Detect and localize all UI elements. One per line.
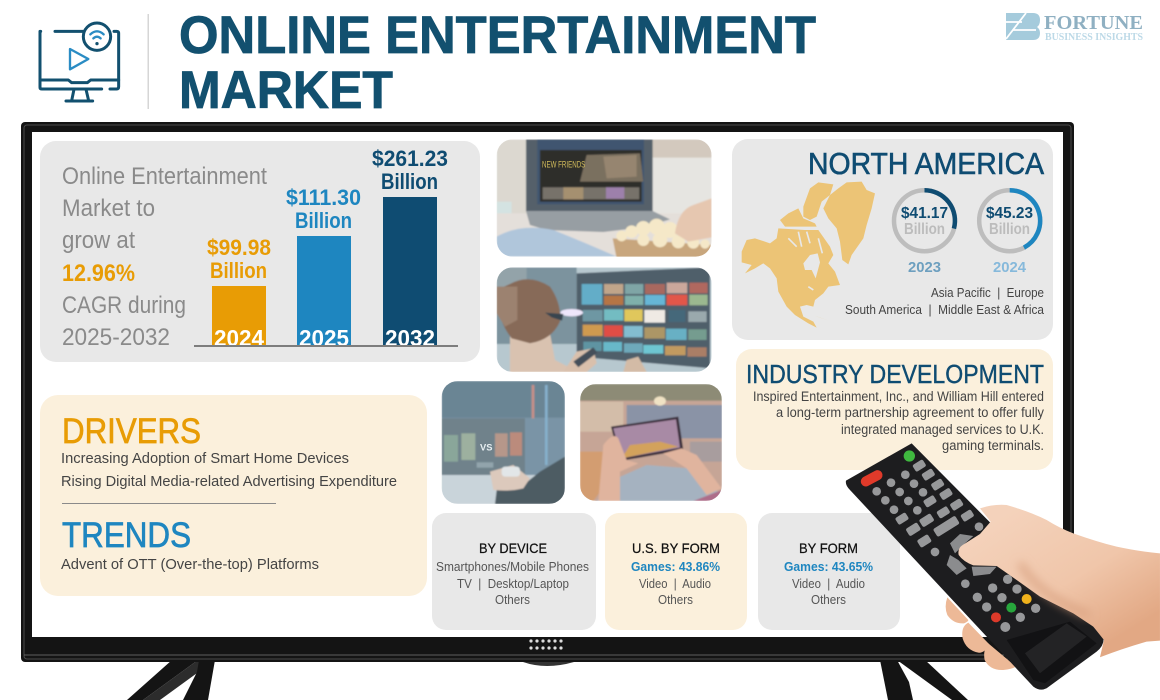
text: CAGR statement: 2025-2032 [62, 324, 170, 351]
panel: u.s. by form: Others [658, 593, 693, 607]
text: development description: Inspired Entertainment, Inc., and William Hill entered [753, 389, 1044, 404]
panel: drivers and trends [40, 395, 427, 596]
text: CAGR statement: Market to [62, 195, 155, 222]
text: development description [753, 389, 1044, 453]
photo: laptop with popcorn: NEW FRIENDS [542, 159, 585, 169]
panel: market growth [40, 141, 480, 362]
photo: mobile gaming in hands [580, 384, 722, 501]
ring: 2023 value [894, 190, 955, 276]
text: development description: gaming terminals. [942, 438, 1044, 453]
bar chart: $99.98 [207, 235, 271, 260]
map: north america [742, 182, 875, 328]
tv stand legs [127, 660, 968, 700]
heading: trends: TRENDS [62, 516, 191, 555]
photo: woman watching streaming tv [497, 267, 712, 372]
photo: console game versus screen [442, 381, 565, 504]
hand and thumb [958, 505, 1160, 657]
panel: u.s. by form: U.S. BY FORM [632, 540, 720, 556]
bar chart [194, 146, 458, 351]
text: trend list: Advent of OTT (Over-the-top) Platforms [61, 556, 319, 573]
bar chart: Billion [381, 169, 438, 194]
fingers behind the remote [946, 597, 1016, 670]
bar chart: 2032 [385, 325, 435, 351]
bar chart: Billion [295, 208, 352, 233]
panel: by form: Games: 43.65% [784, 559, 873, 574]
text: development description: integrated managed services to U.K. [841, 422, 1044, 437]
panel: by device: Smartphones/Mobile Phones [436, 560, 589, 574]
divider [148, 14, 149, 109]
panel: by device [432, 513, 596, 630]
bar chart: $261.23 [372, 146, 448, 171]
text: development description: a long-term partnership agreement to offer fully [776, 405, 1044, 420]
text: driver list: Increasing Adoption of Smart Home Devices [61, 450, 349, 467]
title [179, 6, 816, 120]
text: other regions: Asia Pacific | Europe [931, 285, 1044, 300]
panel: by device: BY DEVICE [479, 540, 547, 556]
text: driver list [61, 450, 397, 490]
panel: by device: Others [495, 593, 530, 607]
logo: Fortune Business Insights: FORTUNE [1044, 12, 1143, 34]
tv frame [21, 122, 1074, 666]
text: CAGR statement: grow at [62, 227, 135, 254]
photo: console game versus screen: VS [480, 442, 492, 452]
bar chart: 2025 [299, 325, 349, 351]
panel: by form: Others [811, 593, 846, 607]
text: CAGR statement: CAGR during [62, 292, 186, 319]
bar chart: 2024 [214, 325, 264, 351]
text: other regions [845, 285, 1045, 317]
icon: monitor with play and wifi [40, 23, 119, 101]
text: CAGR statement: 12.96% [62, 260, 135, 287]
ring: 2024 value [979, 190, 1040, 276]
bar chart: Billion [210, 258, 267, 283]
heading: industry development: INDUSTRY DEVELOPMENT [746, 359, 1044, 389]
panel: u.s. by form: Games: 43.86% [631, 559, 720, 574]
photo: laptop with popcorn [497, 139, 712, 258]
remote buttons [859, 450, 1040, 632]
ring: 2024 value: 2024 [993, 260, 1026, 276]
text: other regions: South America | Middle East & Africa [845, 302, 1045, 317]
ring: 2023 value: $41.17 [901, 205, 948, 222]
logo: Fortune Business Insights: BUSINESS INSIGHTS [1045, 32, 1143, 43]
heading: north america: NORTH AMERICA [808, 146, 1044, 181]
ring: 2023 value: 2023 [908, 260, 941, 276]
panel: by form [758, 513, 900, 630]
ring: 2024 value: Billion [989, 221, 1030, 238]
hand holding remote control [846, 443, 1160, 690]
panel: u.s. by form: Video | Audio [639, 577, 711, 591]
panel: by form: BY FORM [799, 540, 858, 556]
panel: industry development [736, 349, 1053, 470]
panel: by device: TV | Desktop/Laptop [457, 577, 569, 591]
text: CAGR statement: Online Entertainment [62, 163, 267, 190]
title: MARKET [179, 61, 393, 120]
ring: 2023 value: Billion [904, 221, 945, 238]
logo: Fortune Business Insights [1006, 12, 1143, 43]
text: CAGR statement [62, 163, 267, 351]
panel: u.s. by form [605, 513, 747, 630]
ring: 2024 value: $45.23 [986, 205, 1033, 222]
bar chart: $111.30 [286, 185, 361, 210]
panel: north america [732, 139, 1053, 340]
panel: by form: Video | Audio [792, 577, 865, 591]
title: ONLINE ENTERTAINMENT [179, 6, 816, 65]
heading: drivers: DRIVERS [62, 412, 201, 451]
text: driver list: Rising Digital Media-related Advertising Expenditure [61, 473, 397, 490]
remote body [846, 443, 1104, 690]
